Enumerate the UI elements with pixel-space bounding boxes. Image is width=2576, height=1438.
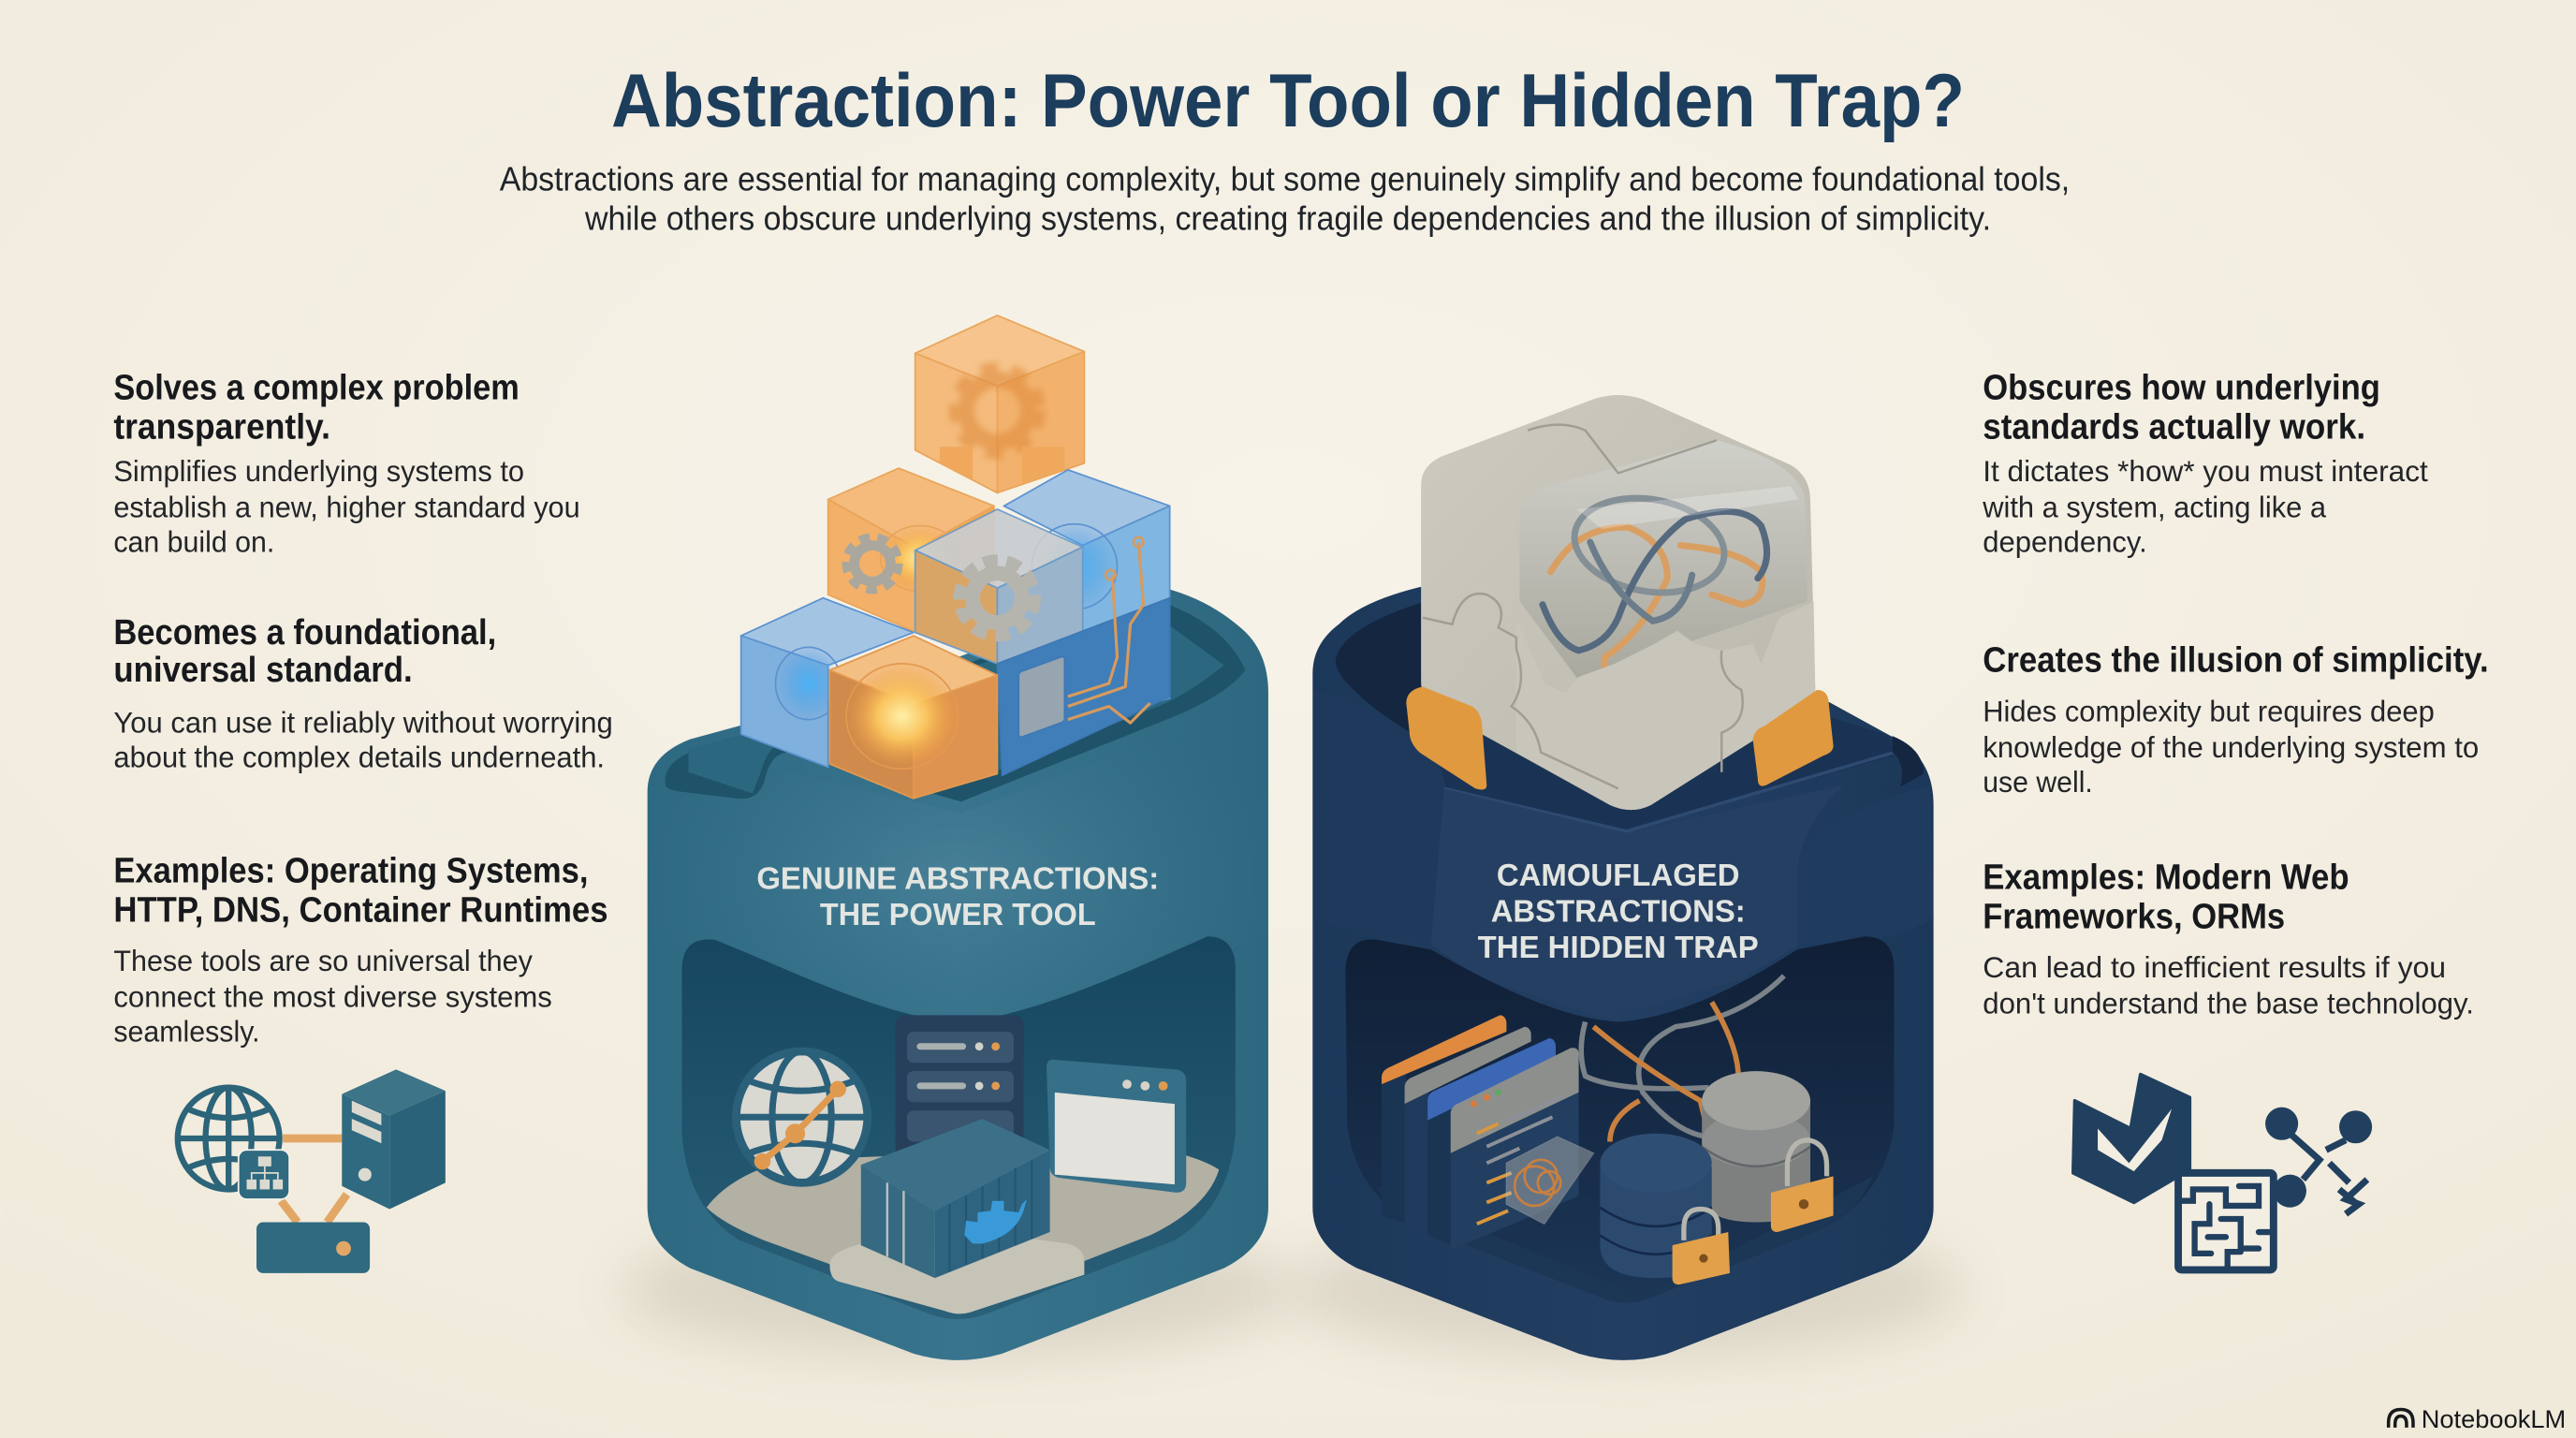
point: foundational standard: Becomes a foundational, bbox=[113, 612, 496, 652]
point: genuine examples: HTTP, DNS, Container Runtimes bbox=[113, 889, 608, 929]
subtitle: while others obscure underlying systems, creating fragile dependencies and the illusion of simplicity. bbox=[584, 199, 1991, 238]
panel: genuine abstractions power tool block bbox=[622, 315, 1295, 1360]
block label bbox=[756, 861, 1159, 932]
panel: camouflaged abstractions text bbox=[1982, 367, 2489, 1020]
point: illusion of simplicity: Creates the illusion of simplicity. bbox=[1983, 640, 2489, 680]
left wing bbox=[1314, 690, 1444, 946]
glass centre cube bbox=[915, 509, 1083, 664]
gray database bbox=[1702, 1071, 1810, 1223]
orange middle cube bbox=[828, 468, 994, 633]
point: illusion of simplicity: knowledge of the underlying system to bbox=[1983, 730, 2479, 764]
point: obscures standards: with a system, acting like a bbox=[1982, 491, 2326, 524]
title: Abstraction: Power Tool or Hidden Trap? bbox=[611, 59, 1965, 143]
blue back cube bbox=[1003, 470, 1170, 723]
panel: genuine abstractions text bbox=[113, 367, 613, 1048]
orange clips bbox=[1406, 686, 1834, 789]
point: obscures standards: It dictates *how* you must interact bbox=[1983, 454, 2428, 488]
lower compartment bbox=[1345, 936, 1894, 1302]
point: camouflaged examples bbox=[1983, 857, 2474, 1020]
tray surface bbox=[1412, 657, 1894, 831]
point: illusion of simplicity bbox=[1983, 640, 2489, 799]
browser window bbox=[1046, 1060, 1186, 1193]
block label: GENUINE ABSTRACTIONS: bbox=[756, 861, 1159, 896]
point: genuine examples: Examples: Operating Systems, bbox=[113, 850, 588, 889]
point: genuine examples: connect the most diverse systems bbox=[113, 980, 552, 1014]
point: obscures standards: standards actually work. bbox=[1983, 407, 2365, 447]
point: obscures standards: dependency. bbox=[1983, 525, 2147, 559]
front puzzle wall bbox=[1516, 601, 1815, 810]
block label bbox=[1478, 858, 1759, 965]
tangled wires bbox=[1543, 487, 1767, 677]
floor bbox=[1377, 1176, 1873, 1302]
block shadow bbox=[622, 1224, 1295, 1356]
subtitle: Abstractions are essential for managing complexity, but some genuinely simplify and become foundational tools, bbox=[500, 160, 2070, 198]
blue front cube bbox=[741, 598, 914, 767]
point: obscures standards bbox=[1982, 367, 2428, 559]
globe bbox=[736, 1051, 868, 1182]
point: genuine examples bbox=[113, 850, 608, 1048]
cube stack bbox=[741, 315, 1170, 799]
point: camouflaged examples: Examples: Modern Web bbox=[1983, 857, 2349, 896]
point: camouflaged examples: don't understand the base technology. bbox=[1983, 987, 2474, 1020]
front label band bbox=[1431, 785, 1843, 1019]
point: illusion of simplicity: use well. bbox=[1983, 765, 2093, 799]
point: genuine examples: These tools are so universal they bbox=[113, 944, 533, 977]
tangled cables bbox=[1581, 976, 1784, 1142]
point: solves a complex problem: establish a new, higher standard you bbox=[113, 491, 580, 524]
block shadow bbox=[1290, 1224, 1963, 1356]
block label: THE HIDDEN TRAP bbox=[1478, 931, 1759, 965]
point: solves a complex problem: can build on. bbox=[113, 525, 274, 559]
icon: shield, maze and broken links bbox=[2073, 1075, 2372, 1269]
point: foundational standard bbox=[113, 612, 613, 773]
point: foundational standard: universal standard. bbox=[113, 650, 413, 689]
shipping container bbox=[861, 1119, 1050, 1278]
navy database bbox=[1600, 1134, 1712, 1278]
glass window bbox=[1519, 440, 1807, 680]
panel: camouflaged abstractions hidden trap block bbox=[1290, 395, 1963, 1360]
point: obscures standards: Obscures how underlying bbox=[1983, 367, 2380, 406]
point: solves a complex problem: Simplifies underlying systems to bbox=[113, 454, 524, 488]
point: solves a complex problem: Solves a complex problem bbox=[113, 367, 520, 406]
padlock on gray database bbox=[1771, 1140, 1834, 1232]
gray puzzle cube bbox=[1421, 395, 1815, 810]
point: solves a complex problem: transparently. bbox=[113, 407, 330, 447]
front label band bbox=[651, 698, 1265, 1027]
lower compartment bbox=[682, 936, 1236, 1319]
point: solves a complex problem bbox=[113, 367, 580, 559]
block label: CAMOUFLAGED bbox=[1497, 858, 1740, 893]
point: camouflaged examples: Frameworks, ORMs bbox=[1983, 896, 2285, 935]
block label: THE POWER TOOL bbox=[820, 898, 1096, 932]
left inner groove bbox=[1336, 601, 1445, 736]
point: illusion of simplicity: Hides complexity but requires deep bbox=[1983, 694, 2435, 727]
NotebookLM logo: NotebookLM bbox=[2422, 1404, 2566, 1433]
icon: network of globe, server and router bbox=[178, 1069, 446, 1273]
point: foundational standard: You can use it reliably without worrying bbox=[113, 706, 613, 740]
orange glowing cube bbox=[829, 636, 997, 799]
server rack bbox=[896, 1015, 1023, 1160]
right wing bbox=[1797, 785, 1934, 946]
floor plates bbox=[707, 1147, 1219, 1313]
point: foundational standard: about the complex details underneath. bbox=[113, 740, 605, 773]
blue circuit cube bbox=[997, 537, 1170, 775]
point: camouflaged examples: Can lead to inefficient results if you bbox=[1983, 950, 2446, 984]
framework book stack bbox=[1382, 1015, 1593, 1250]
right inner groove bbox=[1893, 736, 1924, 787]
block body bbox=[648, 585, 1268, 1360]
block body bbox=[1312, 585, 1934, 1360]
top tray bbox=[666, 598, 1245, 801]
point: genuine examples: seamlessly. bbox=[113, 1014, 260, 1048]
padlock on navy database bbox=[1673, 1209, 1730, 1284]
orange top cube bbox=[915, 315, 1084, 492]
subtitle bbox=[500, 160, 2070, 238]
block label: ABSTRACTIONS: bbox=[1491, 894, 1746, 929]
